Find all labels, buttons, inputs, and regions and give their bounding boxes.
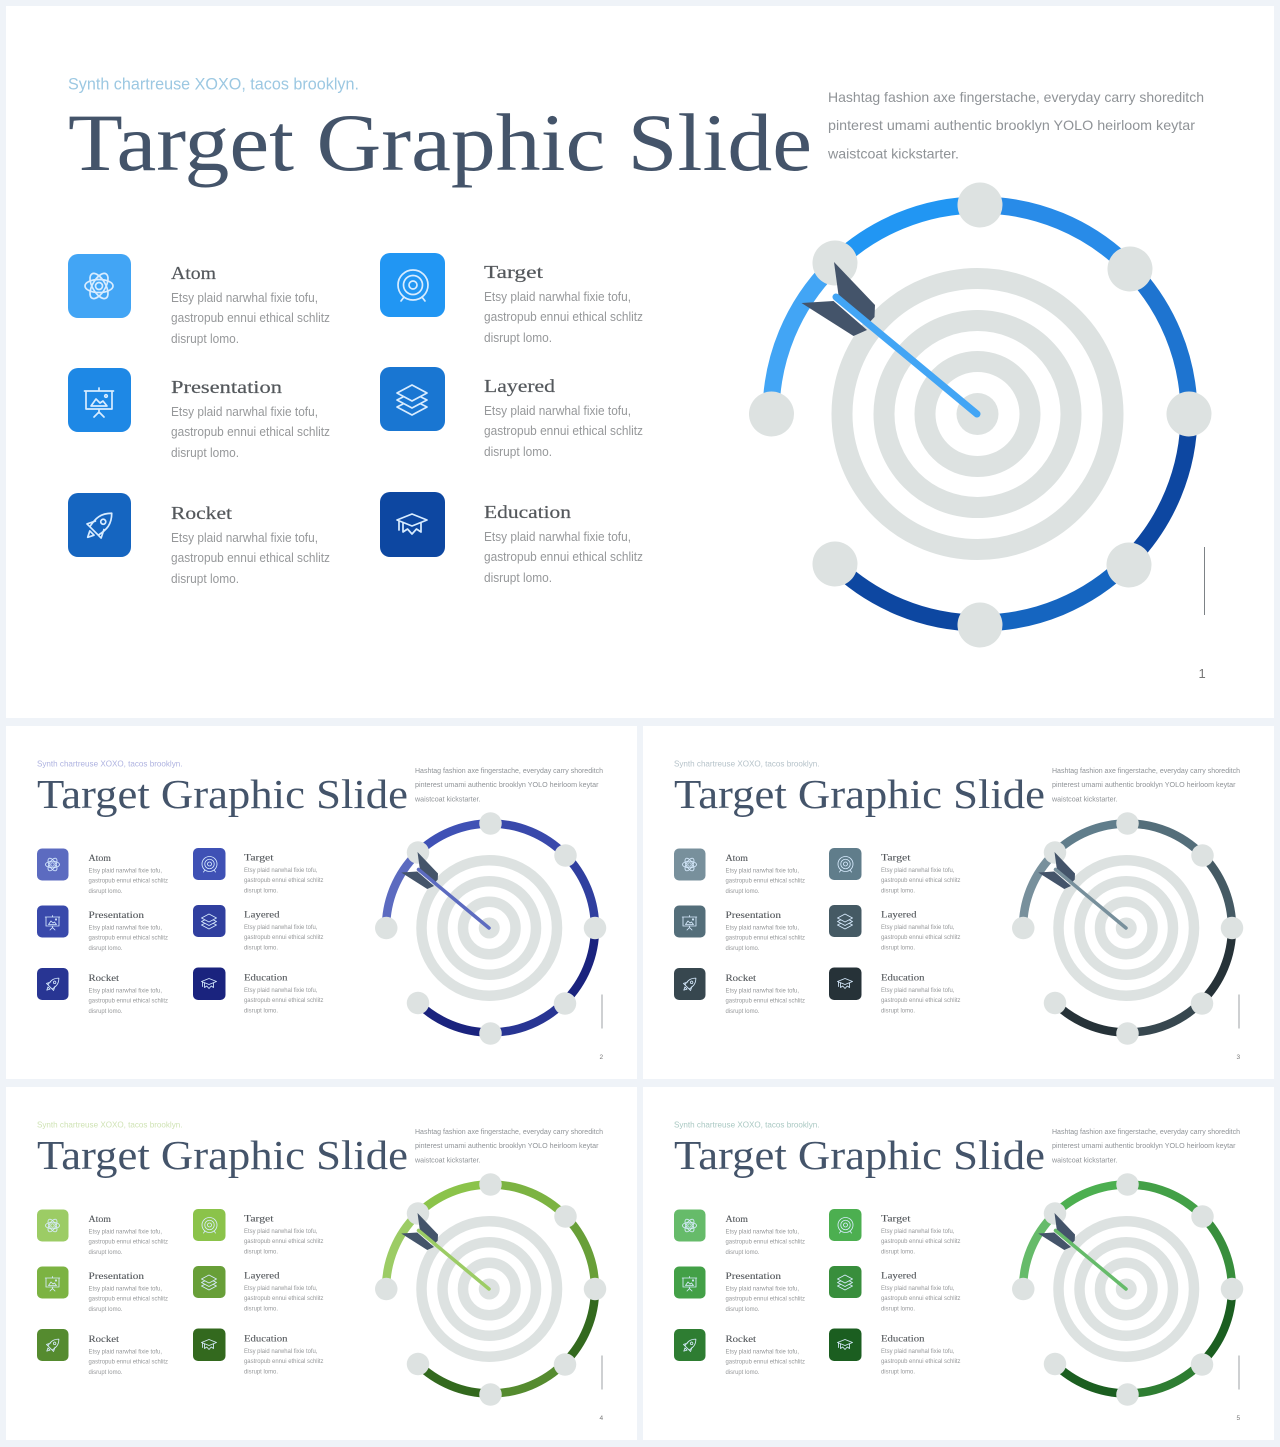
ring nodes [1012, 812, 1243, 1045]
item: Presentation: Etsy plaid narwhal fixie tofu, [88, 924, 162, 932]
arrow [802, 262, 977, 414]
item: Target: disrupt lomo. [244, 1248, 278, 1256]
item: Atom: gastropub ennui ethical schlitz [726, 878, 805, 884]
item: Target: gastropub ennui ethical schlitz [244, 1238, 324, 1245]
item: Layered: disrupt lomo. [484, 445, 552, 459]
item: Atom: Atom [726, 1214, 748, 1224]
item: Education [829, 968, 960, 1014]
item: Education: disrupt lomo. [484, 571, 552, 585]
item: Presentation: Etsy plaid narwhal fixie tofu, [726, 1286, 799, 1292]
item: Atom: gastropub ennui ethical schlitz [726, 1238, 805, 1246]
target diagram [749, 182, 1212, 648]
page number: 1 [1198, 666, 1206, 681]
intro paragraph [827, 89, 1204, 162]
panel: slide 4 (light green) [6, 1087, 637, 1440]
arrow [401, 852, 489, 928]
title: Target Graphic Slide [674, 1132, 1045, 1178]
item: Education: Etsy plaid narwhal fixie tofu, [881, 987, 955, 994]
subtitle: Synth chartreuse XOXO, tacos brooklyn. [37, 758, 182, 768]
item: Rocket: Etsy plaid narwhal fixie tofu, [88, 1348, 162, 1356]
item: Rocket: disrupt lomo. [88, 1369, 123, 1376]
item: Target: gastropub ennui ethical schlitz [881, 877, 960, 884]
intro paragraph [1051, 768, 1240, 803]
item: Atom [68, 254, 330, 346]
title: Target Graphic Slide [37, 771, 408, 817]
intro paragraph: waistcoat kickstarter. [1051, 796, 1118, 803]
item: Education [193, 968, 324, 1014]
item: Target: gastropub ennui ethical schlitz [244, 877, 324, 884]
item: Atom: Atom [171, 263, 216, 283]
title: Target Graphic Slide [68, 97, 812, 188]
item: Education: Education [881, 972, 925, 982]
item: Atom [674, 1210, 805, 1256]
item: Layered [193, 1266, 324, 1312]
item: Education: Etsy plaid narwhal fixie tofu, [244, 987, 318, 994]
item: Education: disrupt lomo. [881, 1368, 915, 1376]
item: Presentation: Etsy plaid narwhal fixie tofu, [88, 1286, 162, 1292]
item: Education: disrupt lomo. [881, 1008, 915, 1014]
item: Presentation: Presentation [88, 1271, 145, 1281]
arrow [1038, 1213, 1126, 1289]
intro paragraph: waistcoat kickstarter. [414, 1157, 481, 1164]
item: Layered [829, 1266, 960, 1312]
item: Rocket [37, 1329, 168, 1376]
item: Layered: Etsy plaid narwhal fixie tofu, [244, 924, 318, 931]
item: Rocket: gastropub ennui ethical schlitz [726, 1358, 805, 1366]
item: Target: gastropub ennui ethical schlitz [484, 310, 643, 324]
item: Layered [193, 905, 324, 952]
item: Education: Education [244, 1334, 288, 1344]
item: Education: gastropub ennui ethical schlitz [881, 997, 960, 1004]
item: Target: gastropub ennui ethical schlitz [881, 1238, 960, 1245]
item: Education: Etsy plaid narwhal fixie tofu, [484, 530, 631, 544]
intro paragraph: Hashtag fashion axe fingerstache, everyday carry shoreditch [415, 1129, 603, 1136]
ring nodes [375, 1173, 606, 1406]
item: Presentation: gastropub ennui ethical schlitz [171, 425, 330, 439]
segmented outer ring [1023, 1184, 1232, 1394]
item: Layered: Layered [244, 910, 280, 920]
subtitle: Synth chartreuse XOXO, tacos brooklyn. [37, 1120, 182, 1130]
intro paragraph: Hashtag fashion axe fingerstache, everyday carry shoreditch [1052, 768, 1240, 775]
target rings [422, 1221, 557, 1357]
item: Presentation: disrupt lomo. [171, 446, 239, 460]
item: Target [829, 848, 960, 894]
item: Education: Education [881, 1334, 925, 1344]
item: Layered: Etsy plaid narwhal fixie tofu, [881, 924, 955, 931]
item: Layered: Etsy plaid narwhal fixie tofu, [484, 404, 631, 418]
item: Target: Target [244, 852, 274, 862]
item: Rocket [37, 968, 168, 1015]
item: Layered: gastropub ennui ethical schlitz [881, 1295, 960, 1302]
intro paragraph [414, 1129, 603, 1164]
item: Rocket: disrupt lomo. [726, 1008, 760, 1015]
item: Target: disrupt lomo. [484, 331, 552, 345]
item: Layered: gastropub ennui ethical schlitz [881, 934, 960, 941]
intro paragraph: waistcoat kickstarter. [414, 796, 481, 803]
intro paragraph: Hashtag fashion axe fingerstache, everyday carry shoreditch [1052, 1129, 1240, 1136]
item: Layered: disrupt lomo. [244, 1306, 278, 1312]
vertical rule [1238, 994, 1240, 1028]
vertical rule [1204, 547, 1206, 615]
item: Education [193, 1328, 324, 1376]
item: Atom: disrupt lomo. [88, 888, 123, 895]
item: Presentation: Presentation [171, 377, 282, 397]
intro paragraph: Hashtag fashion axe fingerstache, everyday carry shoreditch [828, 89, 1204, 105]
item: Education: Education [244, 972, 288, 982]
item: Presentation: Etsy plaid narwhal fixie tofu, [171, 405, 318, 419]
item: Rocket: Rocket [171, 503, 232, 523]
intro paragraph: waistcoat kickstarter. [1051, 1157, 1118, 1164]
panel: slide 5 (green) [643, 1087, 1274, 1440]
item: Target: Target [484, 262, 543, 282]
panel: main slide (blue) [6, 6, 1274, 718]
item: Atom [674, 848, 805, 895]
item grid [37, 848, 324, 1015]
subtitle: Synth chartreuse XOXO, tacos brooklyn. [674, 758, 820, 768]
vertical rule [601, 994, 603, 1028]
item: Presentation: Etsy plaid narwhal fixie tofu, [726, 924, 799, 932]
item: Layered: disrupt lomo. [881, 944, 915, 952]
subtitle: Synth chartreuse XOXO, tacos brooklyn. [68, 74, 359, 94]
intro paragraph: pinterest umami authentic brooklyn YOLO heirloom keytar [415, 782, 599, 789]
item: Layered: Etsy plaid narwhal fixie tofu, [244, 1285, 318, 1292]
item: Rocket: Etsy plaid narwhal fixie tofu, [726, 988, 799, 994]
segmented outer ring [386, 1184, 595, 1394]
target diagram [375, 812, 606, 1045]
item: Rocket: disrupt lomo. [88, 1008, 123, 1015]
item: Layered: gastropub ennui ethical schlitz [484, 424, 643, 438]
item: Atom: disrupt lomo. [726, 1249, 760, 1256]
item: Rocket: gastropub ennui ethical schlitz [88, 1358, 168, 1366]
ring nodes [1012, 1173, 1243, 1406]
intro paragraph: pinterest umami authentic brooklyn YOLO heirloom keytar [1052, 782, 1236, 789]
ring nodes [749, 182, 1212, 648]
item: Rocket: disrupt lomo. [726, 1369, 760, 1376]
item: Presentation: disrupt lomo. [726, 945, 760, 952]
item: Target: Etsy plaid narwhal fixie tofu, [244, 1228, 318, 1235]
intro paragraph: pinterest umami authentic brooklyn YOLO heirloom keytar [828, 117, 1195, 133]
item: Rocket [674, 1329, 805, 1376]
target diagram [1012, 812, 1243, 1045]
item: Layered [380, 367, 643, 459]
arrow [401, 1213, 489, 1289]
item: Atom: Etsy plaid narwhal fixie tofu, [726, 1228, 799, 1236]
intro paragraph: pinterest umami authentic brooklyn YOLO heirloom keytar [1052, 1143, 1236, 1150]
item: Atom: disrupt lomo. [726, 888, 760, 895]
item: Education: Etsy plaid narwhal fixie tofu, [881, 1348, 955, 1355]
item: Presentation [37, 1266, 168, 1313]
target diagram [375, 1173, 606, 1406]
item: Atom: gastropub ennui ethical schlitz [88, 878, 168, 884]
item: Presentation: disrupt lomo. [88, 1306, 123, 1313]
item: Education: gastropub ennui ethical schlitz [881, 1358, 960, 1365]
item: Rocket: gastropub ennui ethical schlitz [88, 998, 168, 1004]
intro paragraph: pinterest umami authentic brooklyn YOLO heirloom keytar [415, 1143, 599, 1150]
intro paragraph [414, 768, 603, 803]
item: Layered: Etsy plaid narwhal fixie tofu, [881, 1285, 955, 1292]
item: Target: disrupt lomo. [881, 888, 915, 894]
title: Target Graphic Slide [37, 1132, 408, 1178]
item: Rocket: gastropub ennui ethical schlitz [171, 551, 330, 565]
item: Presentation [674, 906, 805, 952]
item: Presentation [68, 368, 330, 460]
panel: slide 2 (indigo) [6, 726, 637, 1079]
page number: 2 [600, 1054, 604, 1061]
item: Atom: gastropub ennui ethical schlitz [88, 1238, 168, 1246]
item: Atom [37, 848, 168, 895]
item: Presentation: gastropub ennui ethical schlitz [726, 934, 805, 942]
item: Presentation [37, 906, 168, 952]
item: Target [193, 1209, 324, 1256]
item grid [674, 1209, 960, 1376]
target rings [1058, 860, 1194, 996]
item: Rocket: Rocket [88, 1334, 120, 1344]
target rings [842, 278, 1113, 550]
item: Layered: Layered [244, 1270, 280, 1280]
page number: 5 [1236, 1415, 1240, 1422]
item: Target: disrupt lomo. [881, 1248, 915, 1256]
intro paragraph [1051, 1129, 1240, 1164]
item: Education: gastropub ennui ethical schlitz [244, 1358, 324, 1365]
vertical rule [1238, 1356, 1240, 1390]
arrow [1038, 852, 1126, 928]
page number: 4 [600, 1415, 604, 1422]
panel: slide 3 (blue grey) [643, 726, 1274, 1079]
item: Rocket: Etsy plaid narwhal fixie tofu, [726, 1348, 799, 1356]
item: Atom: Atom [726, 853, 748, 863]
subtitle: Synth chartreuse XOXO, tacos brooklyn. [674, 1120, 820, 1130]
segmented outer ring [386, 824, 595, 1032]
target diagram [1012, 1173, 1243, 1406]
item: Atom: disrupt lomo. [88, 1249, 123, 1256]
item: Target [380, 253, 643, 345]
item: Rocket: Rocket [88, 973, 120, 983]
item: Layered: gastropub ennui ethical schlitz [244, 1295, 324, 1302]
segmented outer ring [771, 205, 1189, 623]
intro paragraph: waistcoat kickstarter. [827, 146, 959, 162]
item: Rocket: Etsy plaid narwhal fixie tofu, [88, 988, 162, 994]
item: Education: gastropub ennui ethical schlitz [244, 997, 324, 1004]
item: Target: Target [244, 1214, 274, 1224]
item: Rocket [68, 493, 330, 586]
item: Layered: Layered [881, 1270, 917, 1280]
ring nodes [375, 812, 606, 1045]
item grid [37, 1209, 324, 1376]
item: Atom: disrupt lomo. [171, 332, 239, 346]
item: Target [829, 1209, 960, 1256]
item: Presentation: Presentation [88, 910, 145, 920]
target rings [1058, 1221, 1194, 1357]
item: Education: Etsy plaid narwhal fixie tofu, [244, 1348, 318, 1355]
target rings [422, 860, 557, 996]
item: Atom: Etsy plaid narwhal fixie tofu, [88, 868, 162, 874]
item: Presentation: gastropub ennui ethical schlitz [726, 1296, 805, 1302]
item: Target: Etsy plaid narwhal fixie tofu, [881, 867, 955, 874]
segmented outer ring [1023, 824, 1232, 1032]
item: Education: disrupt lomo. [244, 1368, 278, 1376]
item: Layered: disrupt lomo. [881, 1306, 915, 1312]
item: Atom: Etsy plaid narwhal fixie tofu, [726, 868, 799, 874]
item: Education [829, 1328, 960, 1376]
item: Presentation: Presentation [726, 1271, 782, 1281]
item: Atom: gastropub ennui ethical schlitz [171, 311, 330, 325]
item: Target: Target [881, 1214, 911, 1224]
item: Education: disrupt lomo. [244, 1008, 278, 1014]
item: Rocket: Rocket [726, 973, 757, 983]
item: Education: gastropub ennui ethical schlitz [484, 550, 643, 564]
item: Rocket: Etsy plaid narwhal fixie tofu, [171, 531, 318, 545]
item: Education: Education [484, 502, 571, 522]
item grid [674, 848, 960, 1015]
item: Atom: Etsy plaid narwhal fixie tofu, [88, 1228, 162, 1236]
item: Layered: Layered [881, 910, 917, 920]
item: Presentation: disrupt lomo. [88, 945, 123, 952]
item: Presentation: gastropub ennui ethical schlitz [88, 1296, 168, 1302]
item: Presentation: disrupt lomo. [726, 1306, 760, 1313]
item: Layered: Layered [484, 376, 555, 396]
item: Target: Target [881, 852, 911, 862]
page number: 3 [1236, 1054, 1240, 1061]
item: Layered: gastropub ennui ethical schlitz [244, 934, 324, 941]
item: Presentation: gastropub ennui ethical schlitz [88, 934, 168, 942]
item: Target: Etsy plaid narwhal fixie tofu, [244, 867, 318, 874]
title: Target Graphic Slide [674, 771, 1045, 817]
intro paragraph: Hashtag fashion axe fingerstache, everyday carry shoreditch [415, 768, 603, 775]
item: Target: Etsy plaid narwhal fixie tofu, [484, 290, 631, 304]
item: Rocket: Rocket [726, 1334, 757, 1344]
item: Atom: Etsy plaid narwhal fixie tofu, [171, 291, 318, 305]
item: Layered [829, 905, 960, 952]
item: Target: Etsy plaid narwhal fixie tofu, [881, 1228, 955, 1235]
item: Presentation [674, 1266, 805, 1313]
vertical rule [601, 1356, 603, 1390]
item: Education [380, 492, 643, 585]
item: Rocket [674, 968, 805, 1015]
item: Target [193, 848, 324, 894]
item: Atom [37, 1210, 168, 1256]
item: Atom: Atom [88, 1214, 111, 1224]
item: Layered: disrupt lomo. [244, 944, 278, 952]
item: Rocket: gastropub ennui ethical schlitz [726, 998, 805, 1004]
item: Rocket: disrupt lomo. [171, 572, 239, 586]
item: Presentation: Presentation [726, 910, 782, 920]
item: Atom: Atom [88, 853, 111, 863]
item: Target: disrupt lomo. [244, 888, 278, 894]
